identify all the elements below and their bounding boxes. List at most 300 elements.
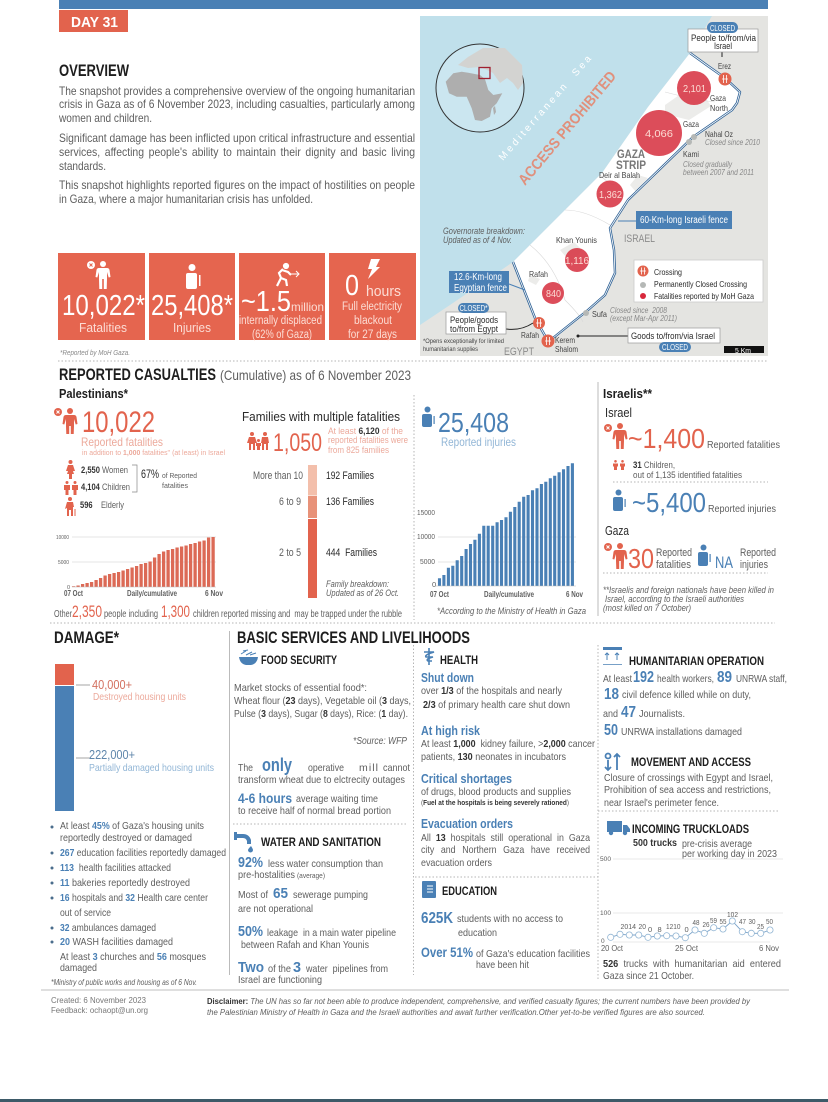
- damage list: damaged: [60, 962, 97, 974]
- fatality bubble: Gaza: 4,066: [645, 129, 673, 140]
- gaza strip: [513, 53, 740, 341]
- label: destroyed: [92, 678, 186, 703]
- critical shortages: Critical shortages: [421, 771, 512, 786]
- map labels: Sufa: [592, 309, 607, 319]
- label: partially damaged: 222,000+: [89, 748, 135, 762]
- line chart: trucks per day: 48: [692, 918, 700, 927]
- fatality bubble: Khan Younis: 1,116: [565, 256, 589, 267]
- note: [328, 426, 408, 455]
- overview text: crisis in Gaza as of 6 November 2023, including casualties, particularly among: [59, 97, 415, 111]
- day badge: DAY 31: [71, 14, 118, 31]
- closed crossing dots: [583, 134, 697, 316]
- overview text: Significant damage has been inflicted upon critical infrastructure and essential: [59, 131, 415, 145]
- staff figures: 50: [604, 722, 618, 739]
- staff figures: 18: [604, 686, 619, 703]
- card: injuries: 25,408*: [151, 290, 233, 322]
- stacked bar labels: Family breakdown:: [326, 579, 389, 590]
- stacked bar labels: More than 10: [253, 470, 303, 482]
- shut down: [421, 670, 570, 711]
- map labels: Updated as of 4 Nov.: [443, 235, 512, 245]
- panel: humanitarian operation: [603, 648, 787, 739]
- footnote: *Ministry of public works and housing as of 6 Nov.: [51, 978, 197, 987]
- icon: fatalities: [604, 543, 628, 569]
- fatality bubble: Deir al Balah: [596, 180, 624, 208]
- callout: Kerem Shalom crossing: Goods to/from/via Israel: [631, 331, 715, 342]
- pre-crisis note: pre-crisis average: [682, 839, 752, 850]
- icon: injured: [698, 544, 711, 566]
- water facts: [238, 854, 396, 986]
- water facts: Two: [238, 959, 264, 976]
- caption: [81, 435, 225, 457]
- education facts: students with no access to: [457, 913, 563, 925]
- icon: truck: [607, 821, 630, 835]
- critical shortages: (Fuel at the hospitals is being severely rationed): [421, 798, 569, 807]
- map labels: ISRAEL: [624, 233, 655, 245]
- bar chart: cumulative injuries: 07 Oct: [430, 590, 449, 599]
- heading: HEALTH: [440, 655, 478, 667]
- callout: Erez crossing: People to/from/via: [691, 33, 756, 43]
- mill note: only: [262, 755, 292, 775]
- line chart: trucks per day: 55: [720, 917, 726, 926]
- staff figures: and: [603, 708, 618, 720]
- fatality bubble: Rafah: 840: [546, 289, 561, 300]
- mill note: cannot: [383, 762, 410, 774]
- food stocks: Wheat flour (23 days), Vegetable oil (3 days,: [234, 695, 411, 707]
- footnote: *According to the Ministry of Health in Gaza: [437, 606, 586, 617]
- subheading: Palestinians: Palestinians*: [59, 386, 129, 401]
- mill note: transform wheat due to elctrecity outages: [238, 774, 405, 786]
- water facts: 92%: [238, 854, 263, 871]
- figure: 30 fatalities: 30: [628, 543, 654, 574]
- stacked bar labels: 2 to 5: [279, 547, 301, 559]
- map labels: between 2007 and 2011: [683, 167, 754, 177]
- line chart: trucks per day: 0: [684, 925, 689, 934]
- icon: hands: [603, 648, 622, 664]
- stacked bar: [308, 465, 317, 598]
- bread note: 4-6 hours: [238, 790, 292, 806]
- overview text: The snapshot provides a comprehensive overview of the ongoing humanitarian: [59, 84, 415, 98]
- missing people note: Other: [54, 609, 72, 620]
- heading: DAMAGE*: [54, 628, 119, 647]
- footnote: (most killed on 7 October): [603, 603, 691, 614]
- water facts: 3: [293, 959, 301, 976]
- map labels: Deir al Balah: [599, 170, 640, 180]
- water facts: between Rafah and Khan Younis: [241, 939, 369, 951]
- icon: tap: [234, 832, 253, 852]
- fatality bubble: Rafah: [542, 282, 564, 304]
- demographic breakdown: [80, 465, 197, 511]
- icon: children: [613, 460, 625, 470]
- damage list: out of service: [60, 907, 111, 919]
- card: fatalities: 10,022*: [62, 290, 145, 322]
- line chart: trucks per day: 20 Oct: [601, 943, 624, 953]
- map labels: Khan Younis: [556, 235, 597, 245]
- panel: water and sanitation: [234, 832, 396, 986]
- staff figures: Journalists.: [639, 708, 685, 720]
- food stocks: Pulse (3 days), Sugar (8 days), Rice: (1 day).: [234, 708, 408, 720]
- line chart: trucks per day: 26: [702, 920, 710, 929]
- line chart: trucks per day: 59: [710, 916, 717, 925]
- note: At least 6,120 of the: [328, 426, 403, 436]
- card: electricity: for 27 days: [348, 329, 397, 341]
- staff figures: 47: [621, 704, 636, 721]
- access text: Prohibition of sea access and restrictions,: [604, 784, 771, 796]
- map labels: Closed since 2008: [610, 305, 667, 315]
- evacuation orders: evacuation orders: [421, 857, 492, 869]
- line chart: trucks per day: 2014: [620, 922, 636, 931]
- children note: 31 Children,: [633, 460, 675, 470]
- shut down: 2/3 of primary health care shut down: [423, 699, 570, 711]
- damage list: 113 health facilities attacked: [60, 862, 171, 874]
- overview text: This snapshot highlights reported figures on the impact of hostilities on people: [59, 178, 415, 192]
- figure: ~1,400: [628, 423, 780, 454]
- staff figures: UNRWA installations damaged: [621, 726, 742, 738]
- bread note: [238, 790, 391, 817]
- pre-crisis note: [633, 838, 777, 860]
- card: displaced: ~1.5: [241, 286, 291, 318]
- water facts: 65: [273, 885, 288, 902]
- callout: Israeli fence: [618, 211, 732, 229]
- stacked bar labels: Updated as of 26 Oct.: [326, 588, 399, 599]
- day badge: [59, 10, 128, 32]
- footer: disclaimer: the Palestinian Ministry of Health in Gaza and the Israeli authorities and await further verification.Other yet-to-be verified figures are also sourced.: [207, 1007, 705, 1017]
- bar chart: cumulative fatalities: 10000: [56, 535, 69, 541]
- callout: Kerem Shalom crossing: CLOSED: [662, 343, 688, 352]
- map labels: humanitarian supplies: [423, 346, 479, 353]
- line chart: trucks per day: 102: [727, 910, 738, 919]
- damage list: 267 education facilities reportedly damaged: [60, 847, 226, 859]
- map legend: Permanently Closed Crossing: [654, 279, 747, 289]
- callout: Israeli fence: 60-Km-long Israeli fence: [640, 215, 728, 226]
- damage list: 16 hospitals and 32 Health care center: [60, 892, 208, 904]
- trucks note: Gaza since 21 October.: [603, 970, 694, 982]
- icon: movement arrows: [605, 754, 620, 770]
- fatality bubble: Gaza North: 2,101: [683, 84, 706, 95]
- education facts: [421, 910, 590, 971]
- footer: credits: Feedback: ochaopt@un.org: [51, 1005, 148, 1015]
- line chart: trucks per day: 1210: [666, 922, 680, 931]
- heading: WATER AND SANITATION: [261, 837, 381, 849]
- heading: FOOD SECURITY: [261, 655, 337, 667]
- map legend: Fatalities reported by MoH Gaza: [654, 291, 754, 301]
- fence lines: [513, 53, 740, 341]
- demographic breakdown: 67%: [141, 469, 159, 481]
- map labels: Rafah: [529, 269, 548, 279]
- overview text: [58, 84, 415, 206]
- map labels: GAZA: [617, 147, 645, 161]
- bottom bar: [0, 1099, 828, 1102]
- mill note: operative: [308, 762, 344, 774]
- footer: disclaimer: Disclaimer: The UN has so far not been able to produce independent, comprehensive, and verified casualty figures; the current numbers have been provided by: [207, 996, 751, 1006]
- card: electricity: [329, 253, 416, 341]
- bar chart: cumulative injuries: 0: [432, 580, 436, 589]
- footer: credits: [51, 995, 148, 1015]
- panel: Israelis: [603, 386, 780, 614]
- figure: ~5,400: Reported injuries: [708, 503, 776, 515]
- callout: Erez crossing: Israel: [714, 41, 732, 51]
- icon: fatalities: [604, 423, 628, 449]
- map labels: Nahal Oz: [705, 129, 733, 139]
- missing people note: [54, 602, 402, 621]
- footer: credits: Created: 6 November 2023: [51, 995, 146, 1005]
- bar chart: cumulative fatalities: 07 Oct: [64, 589, 83, 598]
- staff figures: At least: [603, 673, 632, 685]
- demographic breakdown: 2,550 Women: [81, 465, 128, 476]
- bar chart: cumulative injuries: Daily/cumulative: [484, 590, 534, 599]
- map labels: [423, 61, 760, 358]
- damage list: [50, 820, 226, 974]
- water facts: sewerage pumping: [293, 889, 368, 901]
- map labels: Erez: [718, 61, 731, 71]
- mill note: The: [238, 762, 253, 774]
- bar chart: cumulative fatalities: [56, 535, 223, 598]
- panel: health: [421, 648, 595, 869]
- critical shortages: of drugs, blood products and supplies: [421, 786, 571, 798]
- figure: 30 fatalities: [628, 543, 692, 574]
- stacked bar labels: [253, 470, 399, 599]
- footnote: source: *Reported by MoH Gaza.: [60, 348, 130, 357]
- subheading: Gaza: Gaza: [605, 523, 630, 538]
- mill note: mill: [359, 762, 378, 774]
- map legend: [634, 260, 763, 302]
- figure: 1,050: 1,050: [273, 429, 322, 457]
- panel: injuries: [417, 406, 586, 617]
- water facts: are not operational: [238, 903, 313, 915]
- card: injuries: Injuries: [173, 320, 211, 335]
- staff figures: 89: [717, 669, 732, 686]
- staff figures: health workers,: [657, 673, 714, 685]
- map labels: Rafah: [521, 330, 539, 340]
- damage list: 32 ambulances damaged: [60, 922, 156, 934]
- map labels: Closed gradually: [683, 159, 733, 169]
- trucks note: 526 trucks with humanitarian aid entered: [603, 958, 781, 970]
- note: reported fatalities were: [328, 435, 408, 445]
- panel: movement and access: [604, 754, 773, 809]
- shut down: over 1/3 of the hospitals and nearly: [421, 685, 563, 697]
- overview text: services, affecting people's ability to maintain their dignity and basic living: [59, 145, 415, 159]
- footnote: Israel, according to the Israeli authorities: [605, 594, 744, 605]
- label: destroyed: 40,000+: [92, 678, 132, 692]
- line chart: trucks per day: 30: [748, 917, 756, 926]
- water facts: water pipelines from: [305, 963, 388, 975]
- evacuation orders: Evacuation orders: [421, 816, 513, 831]
- demographic breakdown: of Reported: [162, 471, 197, 480]
- panel: damage: [50, 628, 226, 987]
- map labels: Governorate breakdown:: [443, 226, 525, 236]
- stacked bar labels: 136 Families: [326, 496, 374, 508]
- callout: Erez crossing: [688, 22, 758, 57]
- scale bar: [724, 346, 764, 355]
- heading: Families with multiple fatalities: [242, 410, 400, 424]
- caption: in addition to 1,000 fatalities'' (at least) in Israel: [82, 448, 225, 457]
- label: partially damaged: Partially damaged housing units: [89, 762, 214, 774]
- stacked bar labels: 6 to 9: [279, 496, 301, 508]
- icon: injured: [422, 406, 435, 427]
- bar chart: cumulative fatalities: 5000: [58, 560, 69, 566]
- callout: Erez crossing: CLOSED: [710, 24, 735, 33]
- callout: Rafah crossing: People/goods: [450, 315, 498, 326]
- figure: ~5,400: [632, 487, 776, 518]
- bread note: to receive half of normal bread portion: [238, 805, 391, 817]
- line chart: trucks per day: [600, 856, 783, 953]
- overview heading: OVERVIEW: [59, 61, 130, 80]
- icon: book: [422, 881, 436, 898]
- map labels: Gaza: [710, 93, 726, 103]
- card: electricity: blackout: [354, 315, 393, 327]
- water facts: Israel are functioning: [238, 974, 322, 986]
- trucks note: [603, 958, 781, 982]
- map labels: Closed since 2010: [705, 137, 760, 147]
- header bar: [59, 0, 768, 9]
- footnote: [603, 585, 774, 614]
- missing people note: children reported missing and may be trapped under the rubble: [193, 609, 402, 620]
- panel: education: [421, 881, 590, 971]
- figure: NA injuries: injuries: [740, 559, 768, 571]
- card: electricity: hours: [366, 283, 401, 300]
- heading: Israelis: Israelis**: [603, 386, 653, 401]
- water facts: of the: [268, 963, 291, 975]
- line chart: trucks per day: 0: [601, 938, 605, 945]
- heading: basic services: BASIC SERVICES AND LIVELIHOODS: [237, 628, 470, 647]
- missing people note: 2,350: [72, 602, 102, 621]
- education facts: have been hit: [476, 959, 529, 971]
- map legend: Crossing: [654, 267, 682, 277]
- figure: 30 fatalities: fatalities: [656, 559, 691, 571]
- caption: Reported injuries: [441, 435, 516, 449]
- card: electricity: 0: [345, 270, 359, 302]
- missing people note: people including: [104, 609, 158, 620]
- bar chart: cumulative injuries: 5000: [420, 557, 435, 566]
- map labels: EGYPT: [504, 346, 534, 358]
- icon: caduceus: [424, 648, 434, 665]
- figure: ~1,400: ~1,400: [628, 423, 705, 454]
- bread note: average waiting time: [296, 793, 378, 805]
- line chart: trucks per day: 20: [638, 922, 646, 931]
- education facts: 625K: [421, 910, 453, 927]
- fatality bubble: Gaza: [636, 110, 682, 156]
- note: from 825 families: [328, 445, 389, 455]
- access text: near Israel's perimeter fence.: [604, 797, 719, 809]
- map labels: (except Mar-Apr 2011): [610, 313, 677, 323]
- panel: key figures: [58, 253, 416, 341]
- line chart: trucks per day: 8: [658, 925, 662, 934]
- demographic breakdown: 596 Elderly: [80, 500, 124, 511]
- map labels: Gaza: [683, 119, 699, 129]
- subheading: Israel: Israel: [605, 405, 632, 420]
- callout: Rafah crossing: CLOSED*: [460, 304, 488, 313]
- fatality bubble: Deir al Balah: 1,362: [599, 190, 622, 201]
- water facts: less water consumption than: [268, 858, 383, 870]
- callout: Egyptian fence: Egyptian fence: [454, 283, 507, 294]
- icon: injured: [613, 490, 626, 511]
- locator globe: [436, 44, 524, 132]
- overview text: standards.: [59, 159, 106, 173]
- map labels: North: [710, 103, 728, 113]
- crossing icons: [533, 72, 732, 348]
- label: partially damaged: [89, 748, 214, 774]
- caption: Reported fatalities: [81, 435, 163, 449]
- water facts: 50%: [238, 923, 263, 940]
- fatality bubble: Gaza North: [677, 71, 711, 105]
- panel: families with multiple fatalities: [242, 410, 408, 599]
- line chart: trucks per day: 25: [757, 922, 764, 931]
- bar chart: cumulative fatalities: 0: [67, 585, 70, 591]
- label: Mediterranean Sea: Mediterranean Sea: [497, 54, 594, 163]
- figure: NA injuries: NA: [715, 553, 733, 572]
- callout: Rafah crossing: to/from Egypt: [450, 324, 498, 335]
- at high risk: At high risk: [421, 723, 481, 738]
- card: injuries: [149, 253, 235, 340]
- pre-crisis note: per working day in 2023: [682, 849, 777, 860]
- access text: [604, 772, 773, 809]
- pre-crisis note: 500 trucks: [633, 838, 677, 849]
- icon: woman: [66, 460, 75, 479]
- card: fatalities: Fatalities: [79, 320, 127, 335]
- panel: incoming truckloads: [600, 821, 783, 982]
- scale bar: 5 Km: [735, 348, 751, 355]
- children note: [633, 460, 742, 480]
- figure: 25,408: 25,408: [438, 407, 509, 438]
- footer: disclaimer: [207, 996, 751, 1017]
- figure: ~1,400: Reported fatalities: [707, 439, 780, 451]
- critical shortages: [421, 771, 571, 807]
- heading: EDUCATION: [442, 886, 497, 898]
- card: fatalities: [58, 253, 145, 340]
- icon: family: [247, 432, 269, 450]
- land background: [420, 16, 768, 356]
- heading: reported casualties: [59, 365, 411, 384]
- damage list: At least 45% of Gaza's housing units: [60, 820, 204, 832]
- evacuation orders: [421, 816, 590, 869]
- figure: 30 fatalities: Reported: [656, 547, 692, 559]
- line chart: trucks per day: 47: [739, 917, 746, 926]
- food stocks: Market stocks of essential food*:: [234, 682, 367, 694]
- heading: MOVEMENT AND ACCESS: [631, 757, 751, 769]
- figure: 10,022: 10,022: [82, 406, 155, 439]
- food stocks: *Source: WFP: [353, 735, 407, 747]
- bar chart: cumulative injuries: 10000: [417, 532, 435, 541]
- map labels: Kami: [683, 149, 699, 159]
- demographic breakdown: fatalities: [162, 481, 188, 490]
- map labels: STRIP: [616, 158, 646, 172]
- staff figures: 192: [633, 669, 654, 686]
- card: displaced: million: [291, 300, 324, 314]
- callout: Egyptian fence: [449, 271, 525, 294]
- panel: Palestinian fatalities: [54, 406, 402, 621]
- water facts: Most of: [238, 889, 268, 901]
- staff figures: civil defence killed while on duty,: [622, 689, 751, 701]
- missing people note: 1,300: [161, 602, 190, 621]
- demographic breakdown: 4,104 Children: [81, 482, 130, 493]
- line chart: trucks per day: 0: [648, 925, 652, 934]
- mill note: [238, 755, 410, 786]
- heading: HUMANITARIAN OPERATION: [629, 656, 764, 668]
- icon: fatalities: [54, 408, 78, 434]
- label: destroyed: Destroyed housing units: [93, 691, 186, 703]
- label: access prohibited: ACCESS PROHIBITED: [515, 68, 620, 189]
- bar chart: cumulative injuries: 6 Nov: [566, 590, 583, 599]
- line chart: trucks per day: 500: [600, 856, 611, 863]
- line chart: trucks per day: 50: [766, 917, 773, 926]
- stacked bar: housing: [55, 664, 90, 811]
- shut down: Shut down: [421, 670, 474, 685]
- water facts: (average): [297, 871, 325, 880]
- overview text: women and children.: [58, 111, 152, 125]
- panel: food security: [234, 650, 411, 817]
- line chart: trucks per day: 6 Nov: [759, 943, 780, 953]
- callout: Egyptian fence: 12.6-Km-long: [454, 272, 502, 283]
- damage list: At least 3 churches and 56 mosques: [60, 951, 206, 963]
